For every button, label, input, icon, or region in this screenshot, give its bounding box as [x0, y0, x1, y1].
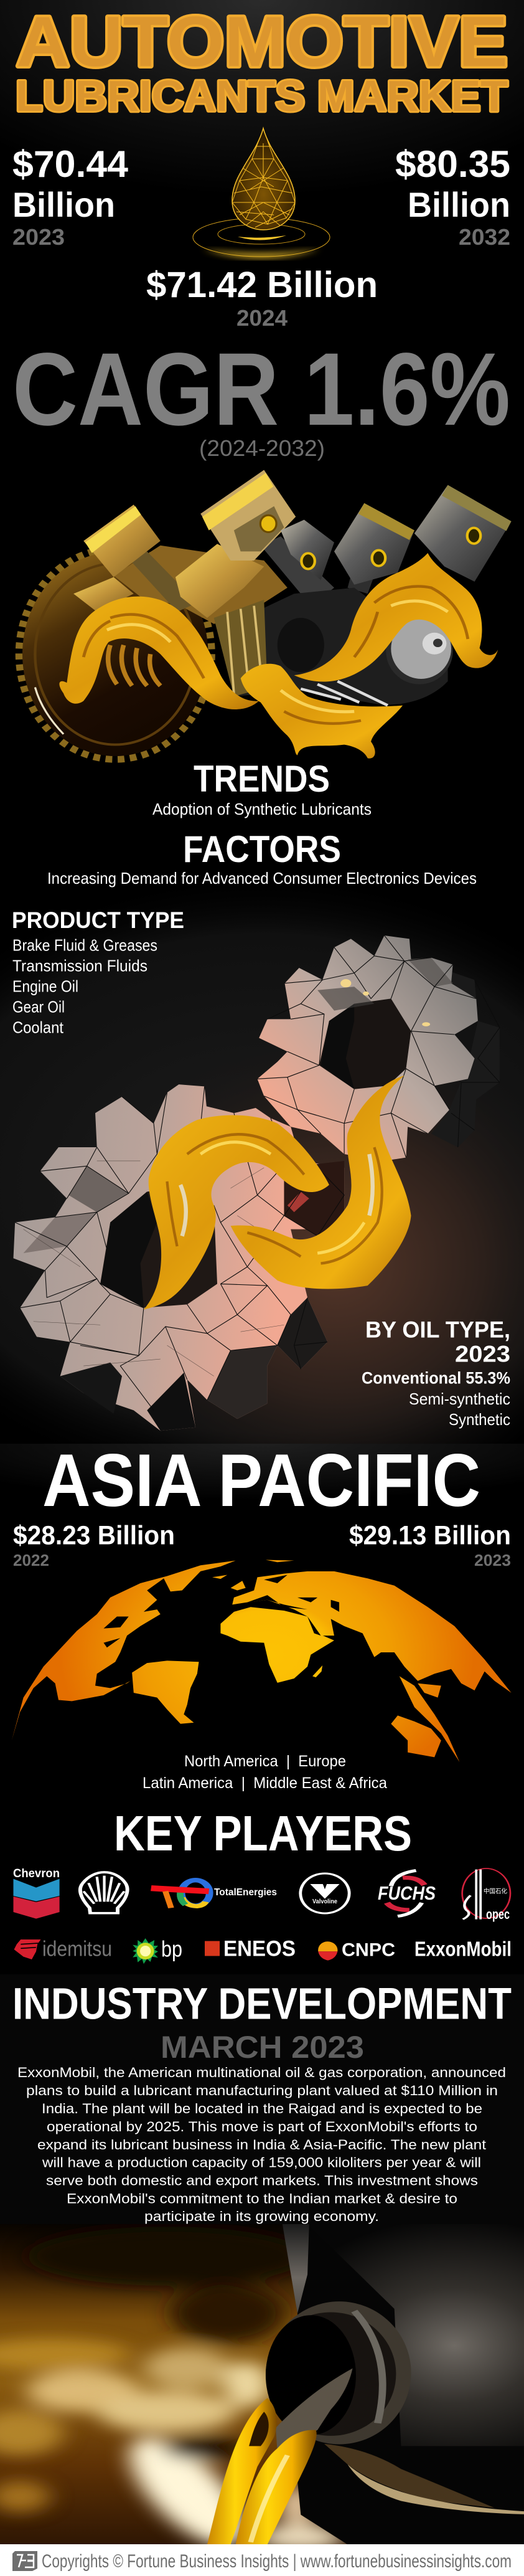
blurred background: [0, 2224, 347, 2544]
list: product type: Gear Oil: [12, 998, 65, 1016]
bottle neck: [266, 2301, 411, 2444]
stat: 2024 market value: $71.42 Billion: [146, 265, 378, 305]
logo: Sinopec: [462, 1868, 510, 1922]
logo: Fuchs: [378, 1870, 436, 1916]
heading: Asia Pacific: ASIA PACIFIC: [42, 1439, 480, 1522]
title: AUTOMOTIVE: [16, 2, 508, 82]
heading: industry development: [12, 1979, 512, 2065]
section: factors: [47, 828, 477, 888]
heading: key players: KEY PLAYERS: [114, 1806, 412, 1861]
logo: CNPC: [318, 1939, 395, 1961]
logo: Valvoline: Valvoline: [312, 1898, 337, 1905]
stat: Asia Pacific 2022: 2022: [13, 1551, 49, 1570]
title: LUBRICANTS MARKET: [16, 72, 508, 120]
section: factors: FACTORS: [183, 828, 341, 870]
text block: industry development description: ExxonMobil, the American multinational oil & gas corporation, announced: [17, 2065, 506, 2080]
icon: golden oil drop with ripples: [193, 128, 330, 258]
Eurasia: [232, 1571, 512, 1693]
crankshaft: [214, 588, 453, 706]
logo: Idemitsu: [14, 1937, 112, 1961]
text block: industry development description: ExxonMobil's commitment to the Indian market & desire to: [67, 2191, 457, 2206]
Africa: [220, 1607, 334, 1683]
translucent glow behind gold pistons: [114, 546, 288, 624]
section: trends: [152, 758, 372, 818]
logo: Eneos: ENEOS: [223, 1937, 296, 1961]
logo: Idemitsu: idemitsu: [42, 1937, 112, 1961]
oil splash: [59, 553, 498, 759]
logo: Shell: [80, 1872, 128, 1913]
oil stream: [207, 2368, 353, 2544]
section: trends: Adoption of Synthetic Lubricants: [152, 800, 372, 818]
stat: 2032 market value: 2032: [459, 224, 510, 250]
inland seas: [103, 1575, 347, 1647]
photo: oil pouring from a bottle: [0, 2224, 524, 2557]
text block: industry development description: serve both domestic and export markets. This investment shows: [46, 2172, 478, 2189]
Australia: [391, 1715, 441, 1757]
icon: Fortune Business Insights logo: [12, 2551, 37, 2571]
text: other regions: Latin America | Middle East & Africa: [143, 1774, 387, 1792]
list: product type: Transmission Fluids: [12, 957, 147, 975]
text block: industry development description: will have a production capacity of 159,000 kiloliters per year & will: [42, 2155, 481, 2170]
spring coil: [108, 645, 161, 686]
logo: BP: bp: [161, 1936, 182, 1962]
stat: 2032 market value: [395, 143, 510, 250]
list: product type: Brake Fluid & Greases: [12, 935, 157, 954]
Madagascar: [312, 1665, 322, 1677]
text block: industry development description: [17, 2065, 506, 2224]
list: by oil type: BY OIL TYPE,: [365, 1317, 510, 1343]
list: by oil type: Semi-synthetic: [409, 1390, 510, 1408]
illustration: engine pistons, gear and oil splash: [21, 470, 512, 759]
section: factors: Increasing Demand for Advanced Consumer Electronics Devices: [47, 869, 477, 888]
list: product type: Engine Oil: [12, 977, 78, 995]
footer bar: [0, 2544, 524, 2576]
gear wheel: [21, 550, 210, 758]
stat: Asia Pacific 2023: 2023: [474, 1551, 511, 1570]
logo: Sinopec: 中国石化: [484, 1887, 507, 1895]
logo: Fuchs: FUCHS: [378, 1882, 436, 1904]
islands: [212, 1560, 459, 1762]
stat: Asia Pacific 2023: [349, 1521, 511, 1570]
logo: Chevron: Chevron: [13, 1867, 60, 1880]
stat: 2024 market value: [146, 265, 378, 331]
South America: [132, 1660, 199, 1724]
list: by oil type: Conventional 55.3%: [362, 1369, 510, 1388]
list: product type: PRODUCT TYPE: [12, 907, 184, 933]
logo: BP: [133, 1936, 182, 1964]
stat: 2032 market value: $80.35: [395, 143, 510, 185]
text block: industry development description: participate in its growing economy.: [144, 2209, 379, 2224]
logo: Chevron: [13, 1867, 60, 1919]
North America: [12, 1561, 236, 1741]
text block: industry development description: expand its lubricant business in India & Asia-Pacific. The new plant: [37, 2137, 487, 2152]
list: by oil type: [362, 1317, 510, 1429]
CAGR figure: (2024-2032): [199, 435, 325, 461]
text block: industry development description: India. The plant will be located in the Raigad and is expected to be: [42, 2101, 482, 2116]
list: product type: [12, 907, 184, 1036]
logo: Valvoline: [301, 1873, 349, 1913]
stat: Asia Pacific 2022: [13, 1521, 175, 1570]
stat: 2023 market value: Billion: [12, 185, 115, 224]
list: by oil type: 2023: [455, 1342, 510, 1366]
stat: Asia Pacific 2022: $28.23 Billion: [13, 1521, 175, 1551]
logo: TotalEnergies: TotalEnergies: [214, 1887, 277, 1898]
list: by oil type: Synthetic: [449, 1410, 510, 1429]
stat: 2023 market value: $70.44: [12, 143, 129, 185]
upper gear: [257, 935, 500, 1161]
stat: 2024 market value: 2024: [236, 305, 288, 331]
logo: CNPC: CNPC: [342, 1939, 395, 1961]
heading: industry development: MARCH 2023: [161, 2030, 364, 2065]
stat: 2023 market value: 2023: [12, 224, 65, 250]
connecting rods: [130, 536, 378, 612]
text block: industry development description: plans to build a lubricant manufacturing plant valued at $110 Million in: [26, 2083, 498, 2098]
oil swirl: [144, 1076, 411, 1310]
text: other regions: North America | Europe: [184, 1753, 346, 1770]
list: product type: Coolant: [12, 1018, 64, 1036]
stat: Asia Pacific 2023: $29.13 Billion: [349, 1521, 511, 1551]
logo: TotalEnergies: [151, 1880, 277, 1908]
stat: 2023 market value: [12, 143, 129, 250]
world map globe: [12, 1560, 512, 1762]
section: trends: TRENDS: [194, 758, 330, 800]
illustration: low-poly gears with oil swirl: [13, 935, 500, 1431]
title: [16, 2, 508, 120]
logo: Sinopec: opec: [486, 1906, 510, 1922]
text block: industry development description: operational by 2025. This move is part of ExxonMobil's efforts to: [47, 2119, 477, 2134]
pistons: [73, 470, 512, 618]
bottle body: [283, 2224, 524, 2544]
text: other regions: [143, 1753, 387, 1792]
stat: 2032 market value: Billion: [408, 185, 510, 224]
lower gear: [13, 1084, 344, 1431]
